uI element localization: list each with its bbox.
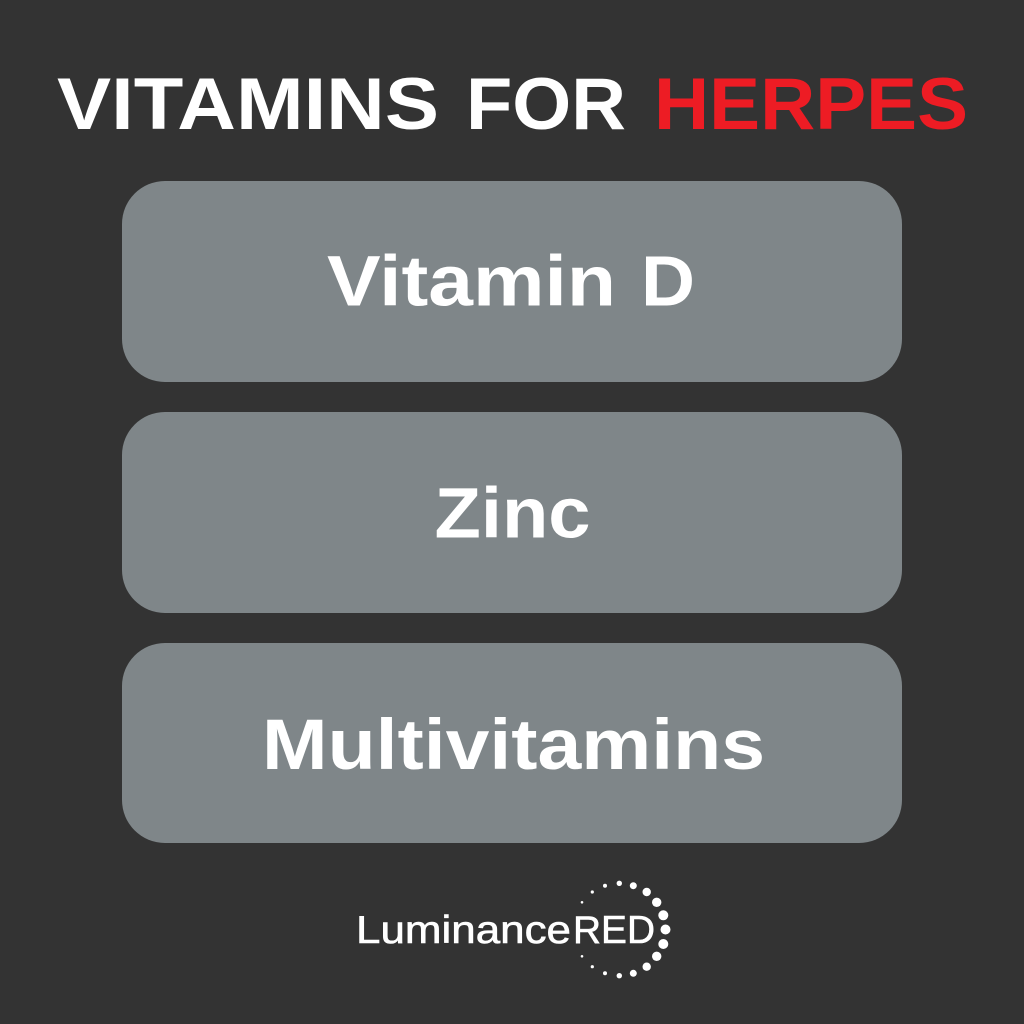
panel: Multivitamins (122, 643, 902, 843)
logo: LuminanceRED (356, 881, 670, 978)
panel: Zinc: Zinc (434, 474, 590, 554)
logo: LuminanceRED: Luminance (356, 909, 571, 952)
panel: Vitamin D: Vitamin (327, 242, 616, 322)
logo: LuminanceRED: RED (573, 909, 655, 952)
title: VITAMINS (57, 64, 439, 145)
title (57, 64, 968, 145)
panel: Vitamin D (122, 181, 902, 382)
title: HERPES (654, 64, 968, 145)
title: FOR (466, 64, 626, 145)
panel: Zinc (122, 412, 902, 613)
panel: Vitamin D: D (641, 242, 695, 322)
panel: Multivitamins: Multivitamins (262, 706, 765, 785)
